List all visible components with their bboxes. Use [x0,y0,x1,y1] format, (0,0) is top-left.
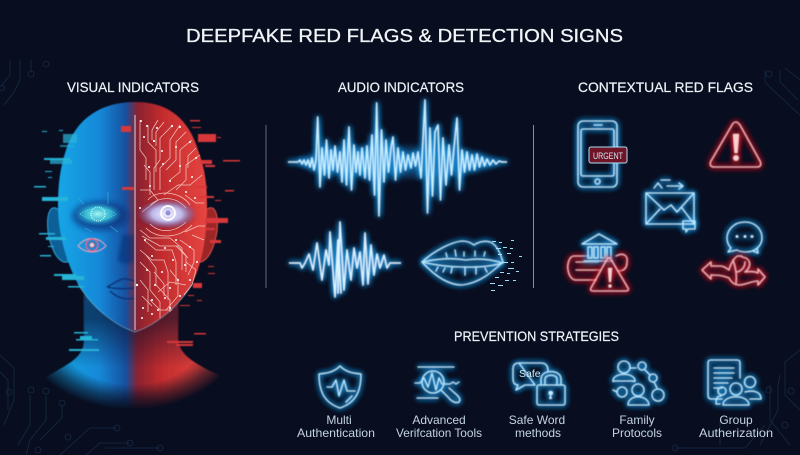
icon: tangled red arrows [702,256,765,285]
label: Group [719,413,753,427]
label: Autherization [699,426,773,440]
label: Family [619,413,655,427]
label: Protocols [612,426,662,440]
panel: prevention strategies [297,328,773,440]
head silhouette [47,102,218,332]
icon: shield with pulse [319,366,361,408]
circuit traces on red half [140,120,205,318]
label: Verifcation Tools [396,426,482,440]
mouth [107,279,135,299]
icon: speech bubble [727,222,762,253]
icon: safe speech bubble and padlock [513,363,565,405]
panel: contextual red flags [568,79,765,291]
heading: visual indicators: VISUAL INDICATORS [67,79,199,95]
chart: main audio waveform [288,100,507,216]
label: Multi [326,413,352,427]
centre seam [134,115,136,330]
panel: audio indicators [288,79,522,297]
background circuit decoration: top-right [765,68,800,115]
circuit nodes [136,120,198,319]
heading: prevention strategies: PREVENTION STRATEGIES [454,328,619,344]
right eye socket shading [141,201,193,229]
background circuit decoration: bottom-right [672,350,800,451]
icon: magnifier on waveform [415,367,460,403]
illustration: split face head [28,102,240,420]
strategy: advanced verification tools [396,367,482,440]
glitch bars: blue [34,130,99,351]
strategy: multi authentication [297,366,375,440]
icon: speech particles [490,240,522,291]
strategy: safe word methods [509,363,565,440]
icon: warning triangle [710,122,761,167]
glowing left eye [74,192,122,232]
icon: pink eye [78,238,106,252]
icon: email with arrows [646,180,695,232]
divider [266,125,267,288]
icon: document with group [708,360,761,405]
panel: visual indicators [28,79,240,420]
nose [118,235,134,264]
icon: smartphone with urgent message [578,121,627,187]
icon: smartphone with urgent message: URGENT [593,151,623,161]
strategy: safe word methods: Safe [519,368,541,380]
title: DEEPFAKE RED FLAGS & DETECTION SIGNS [186,25,623,46]
label: methods [515,426,561,440]
heading: contextual red flags: CONTEXTUAL RED FLAGS [578,79,753,95]
icon: connected family members [613,361,664,405]
strategy: group authorization [699,360,773,440]
label: Advanced [412,413,466,427]
glitch bars: red [121,120,240,346]
strategy: family protocols [612,361,664,440]
heading: audio indicators: AUDIO INDICATORS [338,79,464,95]
label: Authentication [297,426,375,440]
icon: bank with warning [568,234,628,291]
divider [533,125,534,288]
chart: secondary audio waveform [289,222,401,297]
background circuit decoration: top-left [0,60,49,105]
glowing right eye [137,199,197,229]
eye socket shading [72,201,128,231]
icon: lips [422,241,503,285]
background circuit decoration: bottom-left [0,355,163,455]
label: Safe Word [509,413,565,427]
neck and shoulders [46,294,220,408]
